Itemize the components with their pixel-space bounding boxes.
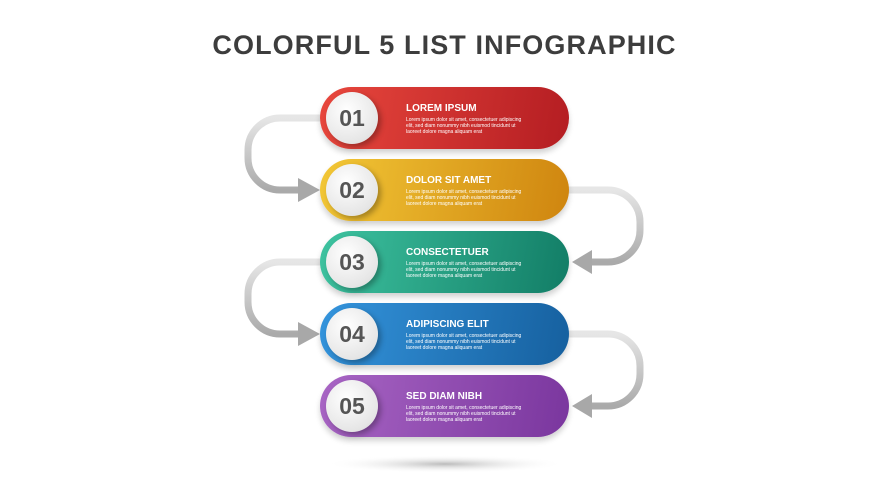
- item 1: LOREM IPSUM: [406, 103, 477, 114]
- item 2: 02: [339, 177, 365, 203]
- item 5: SED DIAM NIBH: [406, 391, 482, 402]
- item 4: ADIPISCING ELIT: [406, 319, 489, 330]
- item 1: Lorem ipsum dolor sit amet, consectetuer adipiscing elit, sed diam nonummy nibh euismod tincidunt ut laoreet dolore magna aliquam erat: [406, 117, 521, 135]
- item 2: [320, 159, 569, 221]
- item 5: [320, 375, 569, 437]
- item 4: [320, 303, 569, 365]
- item 3: 03: [339, 249, 365, 275]
- item 5: Lorem ipsum dolor sit amet, consectetuer adipiscing elit, sed diam nonummy nibh euismod tincidunt ut laoreet dolore magna aliquam erat: [406, 405, 521, 423]
- item 5: 05: [339, 393, 365, 419]
- item 4: 04: [339, 321, 365, 347]
- item 3: Lorem ipsum dolor sit amet, consectetuer adipiscing elit, sed diam nonummy nibh euismod tincidunt ut laoreet dolore magna aliquam erat: [406, 261, 521, 279]
- item 1: [320, 87, 569, 149]
- item 3: CONSECTETUER: [406, 247, 489, 258]
- item 3: [320, 231, 569, 293]
- item 1: 01: [339, 105, 365, 131]
- item 2: Lorem ipsum dolor sit amet, consectetuer adipiscing elit, sed diam nonummy nibh euismod tincidunt ut laoreet dolore magna aliquam erat: [406, 189, 521, 207]
- title: COLORFUL 5 LIST INFOGRAPHIC: [212, 30, 677, 60]
- item 4: Lorem ipsum dolor sit amet, consectetuer adipiscing elit, sed diam nonummy nibh euismod tincidunt ut laoreet dolore magna aliquam erat: [406, 333, 521, 351]
- item 2: DOLOR SIT AMET: [406, 175, 491, 186]
